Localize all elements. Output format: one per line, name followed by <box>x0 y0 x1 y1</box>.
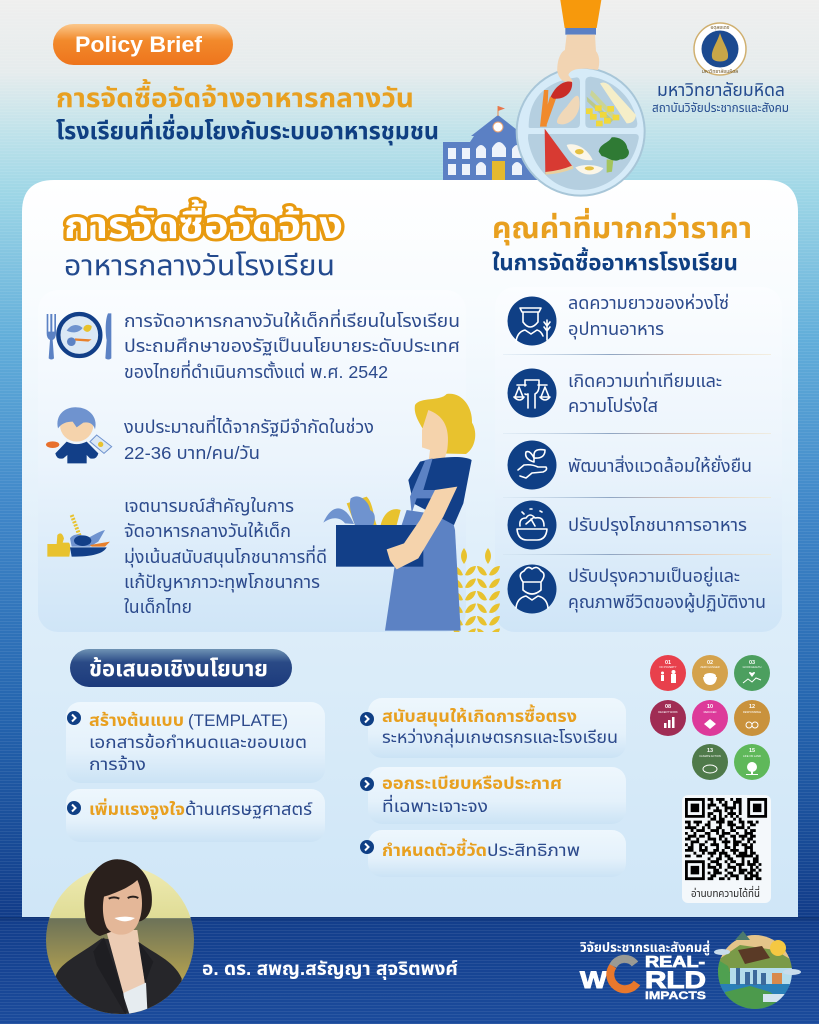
illustration: school <box>443 106 540 180</box>
text: nutrition intent: มุ่งเน้นสนับสนุนโภชนาการที่ดี <box>124 545 327 568</box>
SDG 12 <box>734 700 770 736</box>
panel: values list <box>495 287 782 632</box>
SDG 2: 02 <box>707 660 713 666</box>
title <box>56 79 439 146</box>
SDG 2 <box>692 655 728 691</box>
text: nutrition intent: แก้ปัญหาภาวะทุพโภชนาการ <box>124 572 320 593</box>
illustration: wheat <box>453 548 500 638</box>
policy brief badge <box>53 24 233 65</box>
item: shorten supply chain: อุปทานอาหาร <box>568 319 664 340</box>
recommendation: template: เอกสารข้อกำหนดและขอบเขต <box>89 732 307 752</box>
text: nutrition intent: เจตนารมณ์สำคัญในการ <box>124 496 294 516</box>
text: budget: งบประมาณที่ได้จากรัฐมีจำกัดในช่วง <box>124 415 374 437</box>
SDG 10: REDUCED <box>704 710 717 714</box>
item: equity and transparency: เกิดความเท่าเทียมและ <box>568 371 722 391</box>
heading: value beyond price: ในการจัดซื้ออาหารโรงเรียน <box>492 247 738 275</box>
broccoli <box>607 159 613 173</box>
illustration: hand and plate <box>517 0 645 196</box>
SDG badges <box>650 655 770 780</box>
SDG 8: 08 <box>665 704 671 710</box>
logo: Real-World Impacts: IMPACTS <box>645 990 706 1002</box>
SDG 10: 10 <box>707 704 713 710</box>
heading: value beyond price <box>492 207 752 275</box>
text: budget: 22-36 บาท/คน/วัน <box>124 443 260 463</box>
illustration: farmer with produce box <box>323 394 475 631</box>
portrait background <box>46 868 194 1014</box>
logo: Mahidol University: อดุลยเดช <box>710 25 730 31</box>
eggs <box>567 144 593 160</box>
SDG 13: CLIMATE ACTION <box>699 754 721 758</box>
QR code <box>685 798 767 880</box>
SDG 8: DECENT WORK <box>658 710 678 714</box>
SDG 3 <box>734 655 770 691</box>
apron <box>385 510 461 631</box>
SDG 12: RESPONSIBLE <box>743 710 761 714</box>
SDG 15: LIFE ON LAND <box>743 754 761 758</box>
item: equity and transparency <box>508 368 722 418</box>
hat <box>415 394 475 454</box>
text: nutrition intent: จัดอาหารกลางวันให้เด็ก <box>124 521 291 541</box>
title: โรงเรียนที่เชื่อมโยงกับระบบอาหารชุมชน <box>56 114 439 146</box>
recommendation: economic incentive: ด้านเศรษฐศาสตร์ <box>185 799 313 819</box>
beans and corn <box>587 97 613 123</box>
item: sustainable environment: พัฒนาสิ่งแวดล้อมให้ยั่งยืน <box>568 455 752 476</box>
QR code card <box>682 795 771 903</box>
badge: policy recommendations <box>70 649 292 687</box>
SDG 2: ZERO HUNGER <box>700 665 720 669</box>
recommendation: indicators <box>360 830 626 877</box>
QR code card: อ่านบทความได้ที่นี่ <box>691 885 760 900</box>
box <box>336 525 423 567</box>
heading: procurement: การจัดซื้อจัดจ้าง <box>64 199 343 246</box>
SDG 15 <box>734 744 770 780</box>
heading: value beyond price: คุณค่าที่มากกว่าราคา <box>492 207 752 245</box>
recommendation: regulation <box>360 767 626 824</box>
logo: Real-World Impacts: REAL- <box>645 954 705 971</box>
recommendation: indicators: ประสิทธิภาพ <box>487 841 580 860</box>
SDG 13: 13 <box>707 748 713 754</box>
title: การจัดซื้อจัดจ้างอาหารกลางวัน <box>56 79 414 113</box>
heading: procurement <box>64 199 343 282</box>
SDG 1: 01 <box>665 660 671 666</box>
text: national policy <box>124 309 460 382</box>
text: national policy: ประถมศึกษาของรัฐเป็นนโยบายระดับประเทศ <box>124 336 460 356</box>
item: shorten supply chain <box>508 293 729 346</box>
recommendation: indicators: กำหนดตัวชี้วัด <box>382 838 487 860</box>
carrot <box>540 90 556 127</box>
sleeve <box>560 0 601 28</box>
SDG 3: GOOD HEALTH <box>743 665 761 669</box>
SDG 12: 12 <box>749 704 755 710</box>
SDG 1: NO POVERTY <box>660 665 677 669</box>
plate <box>517 49 645 196</box>
logo: Mahidol University: มหาวิทยาลัยมหิดล <box>702 68 738 75</box>
text: nutrition intent <box>124 496 327 617</box>
logo: Real-World Impacts: วิจัยประชากรและสังคมสู่ <box>580 940 710 956</box>
illustration: globe <box>714 931 801 1012</box>
SDG 15: 15 <box>749 748 755 754</box>
watermelon <box>545 129 573 174</box>
logo: Real-World Impacts: RLD <box>645 967 706 994</box>
item: sustainable environment <box>508 440 752 490</box>
recommendation: template: การจ้าง <box>89 754 146 774</box>
SDG 3: 03 <box>749 660 755 666</box>
produce <box>323 508 354 524</box>
panel: school lunch facts <box>38 290 466 632</box>
heading: procurement: การจัดซื้อจัดจ้าง <box>64 199 343 246</box>
icon: plate and cutlery <box>47 313 111 359</box>
icon: thumbs up and food bowl <box>47 515 110 557</box>
item: worker wellbeing: ปรับปรุงความเป็นอยู่และ <box>568 566 740 588</box>
item: equity and transparency: ความโปร่งใส <box>568 396 658 416</box>
logo: Mahidol University: สถาบันวิจัยประชากรและสังคม <box>652 101 789 115</box>
recommendation: direct purchase: ระหว่างกลุ่มเกษตรกรและโรงเรียน <box>382 728 618 748</box>
item: improve nutrition: ปรับปรุงโภชนาการอาหาร <box>568 515 747 536</box>
text: national policy: ของไทยที่ดำเนินการตั้งแต่ พ.ศ. 2542 <box>124 360 388 382</box>
author name: อ. ดร. สพญ.สรัญญา สุจริตพงศ์ <box>202 959 458 980</box>
shirt <box>408 457 472 525</box>
recommendation: direct purchase <box>360 698 626 758</box>
logo: Real-World Impacts: W <box>580 967 607 994</box>
text: nutrition intent: ในเด็กไทย <box>124 597 192 617</box>
main white panel <box>22 180 798 917</box>
item: worker wellbeing <box>508 564 766 614</box>
face <box>422 410 448 463</box>
recommendation: template: สร้างต้นแบบ <box>89 711 184 730</box>
item: shorten supply chain: ลดความยาวของห่วงโซ่ <box>568 293 729 313</box>
text: budget <box>124 415 374 463</box>
dividers <box>503 354 771 555</box>
text: national policy: การจัดอาหารกลางวันให้เด็กที่เรียนในโรงเรียน <box>124 309 460 331</box>
heading: procurement: อาหารกลางวันโรงเรียน <box>64 250 335 282</box>
recommendation: economic incentive <box>66 789 325 842</box>
logo: Mahidol University <box>652 23 789 115</box>
recommendation: template <box>66 702 325 783</box>
icon: child with lunch and money <box>46 407 112 463</box>
SDG 10 <box>692 700 728 736</box>
recommendation: template: (TEMPLATE) <box>188 711 288 730</box>
SDG 13 <box>692 744 728 780</box>
SDG 1 <box>650 655 686 691</box>
recommendation: direct purchase: สนับสนุนให้เกิดการซื้อตรง <box>382 704 577 727</box>
arm <box>387 487 457 569</box>
recommendation: economic incentive: เพิ่มแรงจูงใจ <box>89 798 185 820</box>
fist over rim <box>557 49 599 82</box>
recommendation: regulation: ออกระเบียบหรือประกาศ <box>382 774 562 793</box>
logo: Real-World Impacts <box>580 940 710 1002</box>
portrait <box>43 859 200 1017</box>
panel bottom shadow <box>0 917 819 922</box>
policy brief badge: Policy Brief <box>75 32 203 57</box>
logo: Mahidol University: มหาวิทยาลัยมหิดล <box>657 80 785 100</box>
badge: policy recommendations: ข้อเสนอเชิงนโยบาย <box>89 656 268 681</box>
apron strap <box>410 458 443 513</box>
recommendation: regulation: ที่เฉพาะเจาะจง <box>382 794 488 816</box>
item: worker wellbeing: คุณภาพชีวิตของผู้ปฏิบัติงาน <box>568 592 766 614</box>
item: improve nutrition <box>508 500 747 550</box>
SDG 8 <box>650 700 686 736</box>
